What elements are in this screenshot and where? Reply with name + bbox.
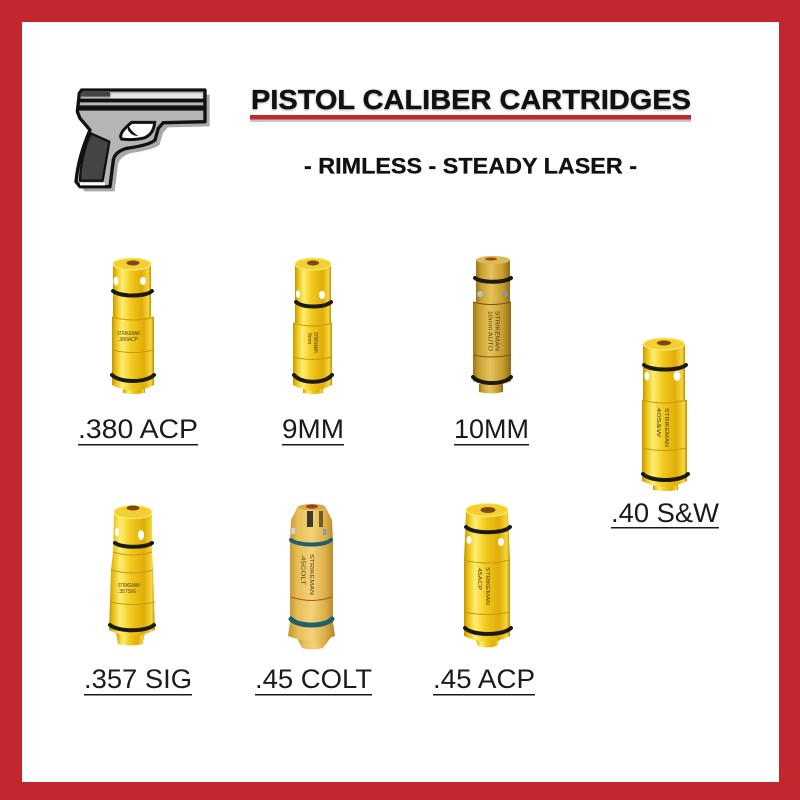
cartridge: 10MM	[473, 256, 511, 394]
cartridge: .357 SIG	[109, 506, 155, 646]
cartridge: .357 SIG: .357SIG	[118, 589, 136, 595]
cartridge: .380 ACP: STRIKEMAN	[117, 331, 140, 337]
icon: pistol	[76, 90, 210, 191]
label: 10MM: 10MM	[454, 414, 529, 444]
cartridge: 9MM: STRIKEMAN	[312, 332, 318, 353]
cartridge: .380 ACP	[112, 258, 154, 394]
label: .45 COLT: .45 COLT	[255, 664, 372, 694]
cartridge: .45 ACP	[464, 504, 511, 648]
cartridge: .40 S&W: STRIKEMAN	[663, 408, 669, 448]
label: .380 ACP: .380 ACP	[78, 414, 198, 444]
label: .45 ACP: .45 ACP	[433, 664, 535, 694]
label: 9MM: 9MM	[282, 414, 344, 444]
cartridge: 10MM: 10mm AUTO	[486, 311, 492, 351]
cartridge: .45 ACP: .45ACP	[476, 566, 482, 591]
cartridge: .40 S&W: .40S&W	[655, 405, 661, 437]
cartridge: .380 ACP: .380ACP	[118, 337, 139, 343]
cartridge: .45 COLT	[288, 504, 335, 650]
label: .40 S&W: .40 S&W	[611, 498, 720, 528]
cartridge: .45 COLT: .45COLT	[300, 554, 306, 585]
cartridge: 9MM: 9mm	[306, 333, 312, 344]
cartridge: .45 COLT: STRIKEMAN	[308, 554, 314, 596]
cartridge: .40 S&W	[642, 338, 688, 491]
title: PISTOL CALIBER CARTRIDGES	[251, 84, 691, 115]
cartridge: 9MM	[293, 258, 332, 394]
cartridge: .357 SIG: STRIKEMAN	[118, 583, 140, 589]
cartridge: .45 ACP: STRIKEMAN	[484, 567, 490, 606]
cartridge: 10MM: STRIKEMAN	[494, 311, 500, 352]
label: .357 SIG: .357 SIG	[84, 664, 192, 694]
subtitle: - RIMLESS - STEADY LASER -	[304, 154, 637, 178]
